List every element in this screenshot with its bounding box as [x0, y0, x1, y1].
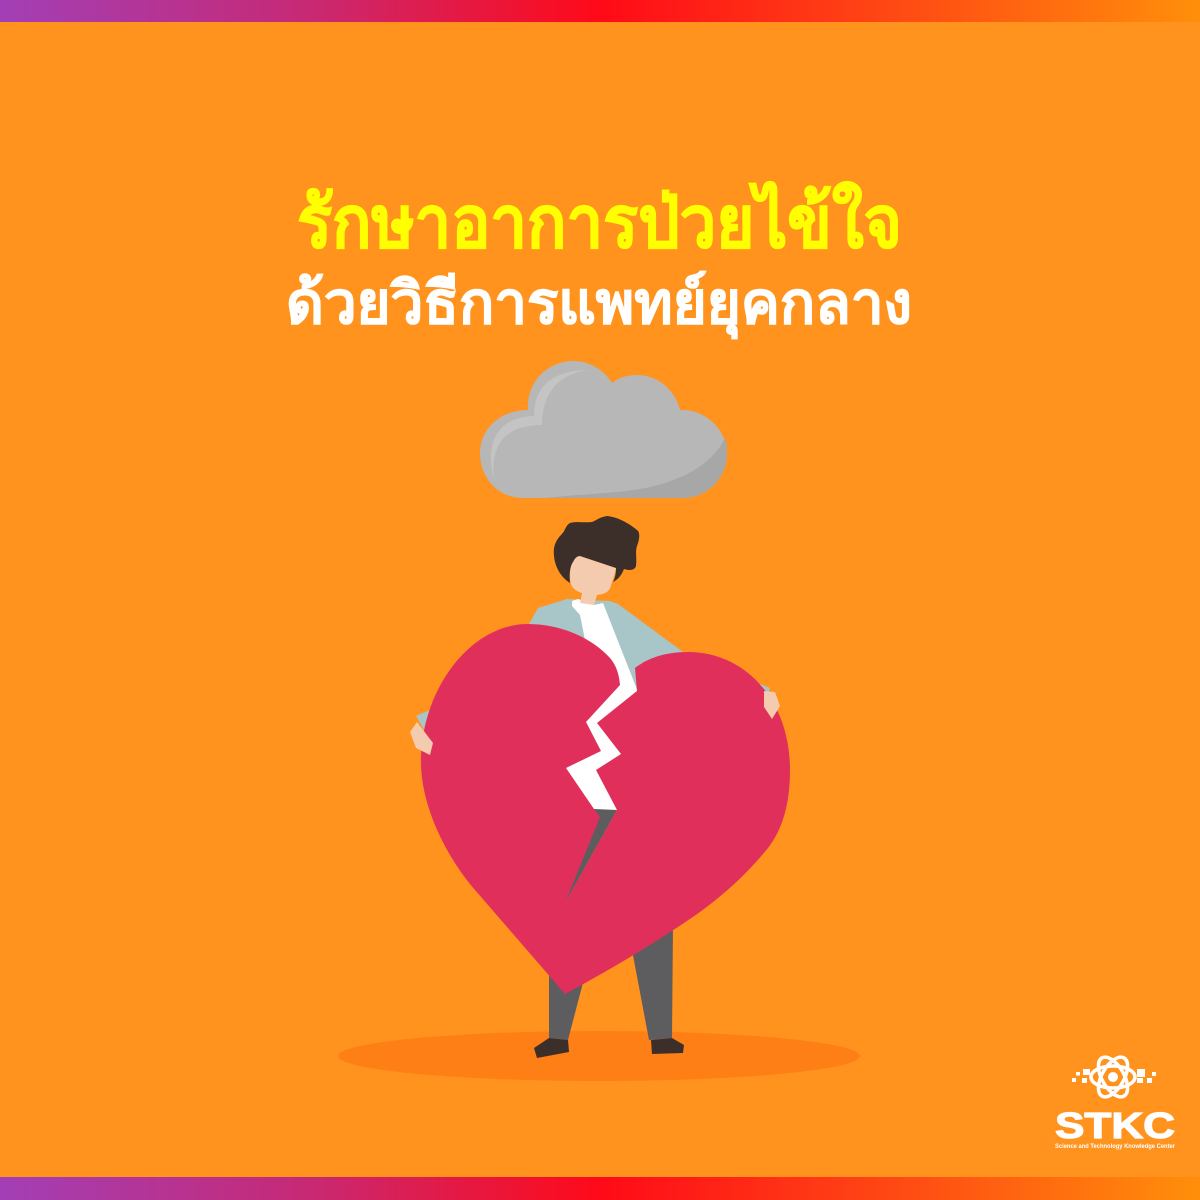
bottom gradient bar [0, 1177, 1200, 1200]
title line 1: รักษาอาการป่วยไข้ใจ [297, 180, 902, 263]
shirt [560, 599, 638, 812]
logo: STKC [1055, 1052, 1175, 1150]
right hand [764, 691, 780, 719]
logo icon: atom [1072, 1052, 1156, 1102]
hair [554, 516, 639, 583]
legs [549, 925, 673, 1040]
right sleeve [755, 682, 770, 695]
heart left half [421, 624, 620, 994]
heart right half [565, 652, 790, 994]
icon: broken heart [421, 624, 790, 994]
crack shadow [565, 809, 617, 903]
top gradient bar [0, 0, 1200, 22]
shoes [534, 1038, 684, 1058]
jacket [460, 599, 683, 700]
ground shadow [338, 1031, 860, 1081]
logo tagline: Science and Technology Knowledge Center [1055, 1143, 1175, 1150]
title line 2: ด้วยวิธีการแพทย์ยุคกลาง [286, 270, 912, 340]
title [286, 180, 912, 340]
logo wordmark: STKC [1055, 1105, 1175, 1146]
person [416, 516, 770, 1058]
left sleeve [416, 710, 430, 740]
left hand [410, 722, 433, 755]
neck and face [570, 556, 616, 605]
icon: grey cloud [480, 361, 727, 498]
